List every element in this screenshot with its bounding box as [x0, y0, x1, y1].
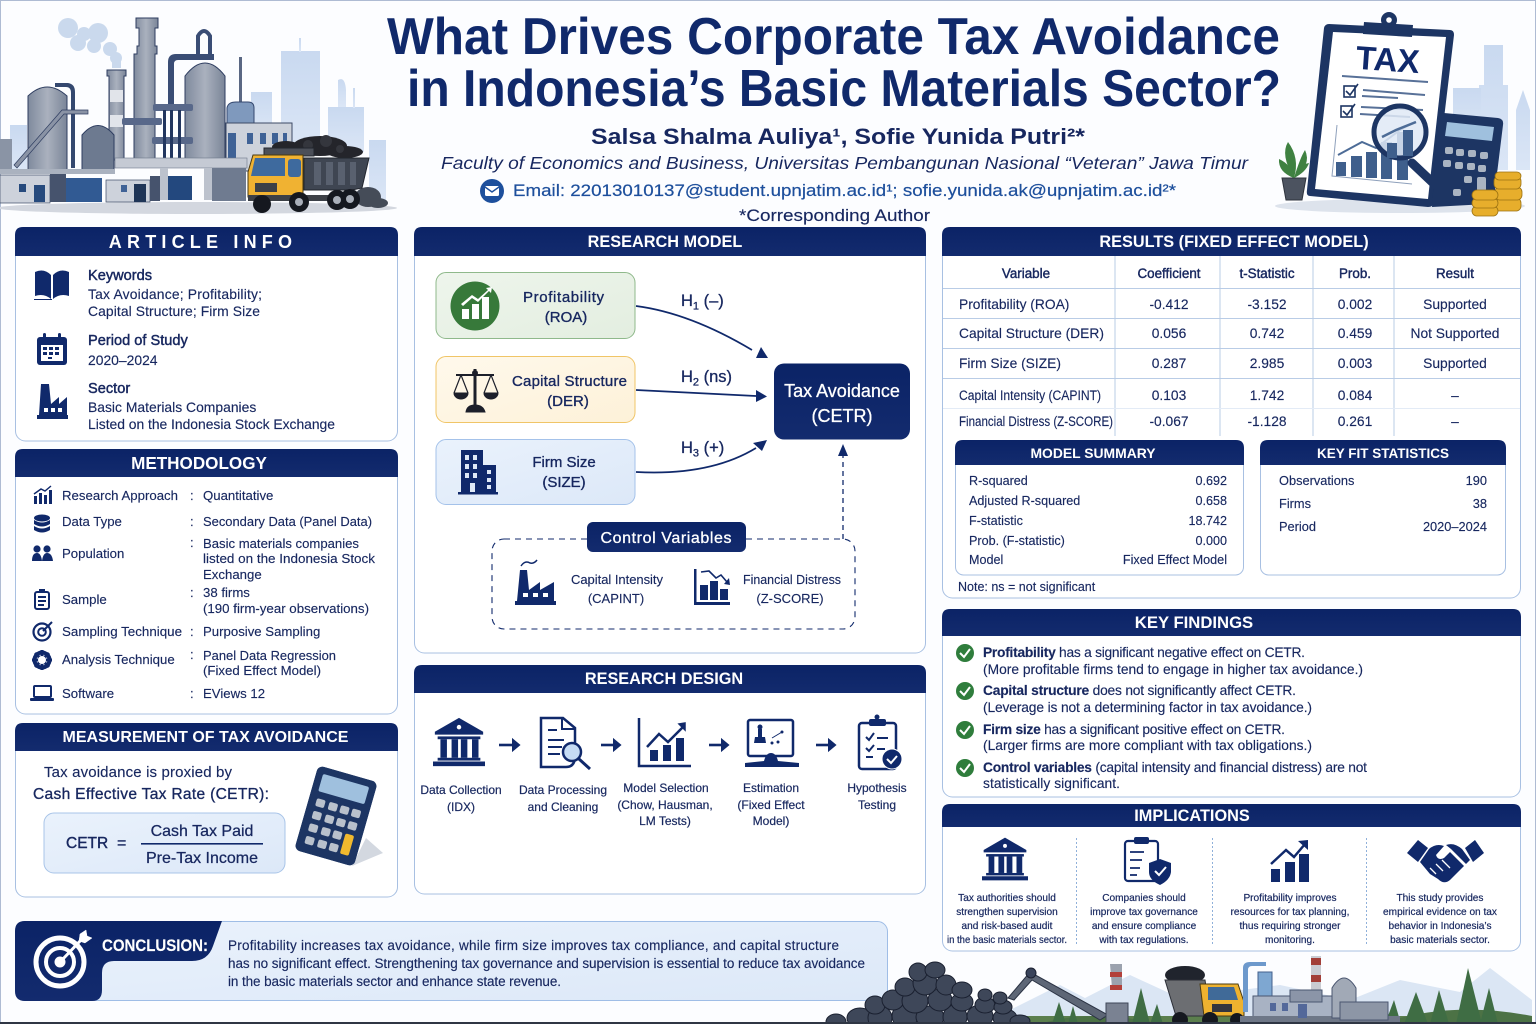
key fit values: Observations [1279, 473, 1354, 488]
row: data type: : [190, 514, 194, 529]
results header: RESULTS (FIXED EFFECT MODEL) [1099, 233, 1369, 251]
row: sample: (190 firm-year observations) [203, 601, 369, 616]
row: financial distress: -0.067 [1149, 414, 1189, 429]
research model header [414, 227, 926, 256]
key fit values: 190 [1466, 473, 1487, 488]
table header row: Coefficient [1137, 266, 1201, 281]
sub-panel: key fit statistics [1260, 440, 1506, 575]
row: capital structure: Not Supported [1411, 326, 1499, 341]
row: financial distress [959, 414, 1459, 429]
table header row [1002, 266, 1474, 281]
arrow [816, 740, 835, 750]
illustration: coal mine and industry landscape [0, 956, 1536, 1024]
table note: Note: ns = not significant [958, 580, 1096, 594]
authors: Salsa Shalma Auliya¹, Sofie Yunida Putri²* [591, 124, 1085, 149]
row: sample [35, 585, 369, 616]
formula: CETR: CETR [66, 835, 108, 852]
finding 4 [956, 759, 1367, 791]
implication: companies: and ensure compliance [1092, 921, 1197, 932]
illustration: tax clipboard, magnifier, calculator, coins: TAX [1355, 39, 1421, 80]
row: firm size: 2.985 [1250, 356, 1285, 371]
icon: email [480, 179, 504, 203]
definition text [33, 764, 269, 803]
row: population: : [190, 535, 194, 550]
research design header: RESEARCH DESIGN [585, 670, 743, 688]
results header [942, 227, 1521, 256]
keywords [88, 268, 262, 319]
model summary values: 0.658 [1195, 494, 1227, 508]
row: capital structure: 0.742 [1250, 326, 1284, 341]
row: sampling technique [34, 622, 320, 640]
financial distress label: (Z-SCORE) [756, 591, 824, 606]
step: hypothesis testing: Testing [858, 798, 896, 812]
arrow: H3 [636, 439, 767, 472]
model summary values: Model [969, 553, 1003, 567]
formula: CETR [44, 813, 285, 873]
row: software [30, 686, 265, 701]
step: data collection: Data Collection [420, 783, 502, 797]
variable: firm size: (SIZE) [542, 474, 586, 491]
step: estimation: Estimation [743, 781, 799, 795]
keywords: Keywords [88, 268, 152, 284]
model summary values: Adjusted R-squared [969, 494, 1080, 508]
finding 3 [956, 721, 1312, 753]
arrow: H3: (+) [699, 439, 724, 457]
arrow: H2: (ns) [699, 368, 732, 386]
panel: methodology [15, 449, 398, 714]
research model header: RESEARCH MODEL [588, 233, 742, 251]
row: data type: Secondary Data (Panel Data) [203, 514, 372, 529]
sector: Basic Materials Companies [88, 399, 256, 415]
conclusion text: Profitability increases tax avoidance, while firm size improves tax compliance, and capital structure [228, 938, 839, 953]
row: capital intensity: – [1451, 388, 1459, 403]
finding 4: statistically significant. [983, 776, 1120, 791]
row: research approach [34, 486, 273, 504]
finding 1: Profitability has a significant negative effect on CETR. [983, 645, 1305, 660]
article info header: ARTICLE INFO [109, 232, 297, 252]
table header row: Result [1436, 266, 1474, 281]
conclusion text: in the basic materials sector and enhance state revenue. [228, 974, 561, 989]
illustration: industrial plant and coal truck [0, 18, 397, 214]
sub-panel: model summary [955, 440, 1244, 575]
step: data processing: Data Processing [519, 783, 607, 797]
conclusion text [228, 938, 865, 989]
row: analysis technique: : [190, 647, 194, 662]
step: hypothesis testing: Hypothesis [847, 781, 907, 795]
step: data processing [519, 718, 607, 814]
row: population: Basic materials companies [203, 536, 359, 551]
row: capital structure: 0.459 [1338, 326, 1373, 341]
row: population: Population [62, 546, 124, 561]
implication: handshake: This study provides [1397, 893, 1483, 904]
row: population [32, 535, 375, 582]
conclusion badge: CONCLUSION: [102, 936, 208, 955]
model summary values: 0.692 [1195, 474, 1227, 488]
illustration: tax clipboard, magnifier, calculator, coins [1275, 12, 1530, 216]
row: firm size: 0.003 [1338, 356, 1373, 371]
variable: profitability: Profitability [523, 289, 604, 306]
implication: profitability: monitoring. [1265, 935, 1315, 946]
model summary values: R-squared [969, 474, 1028, 488]
finding 1 [956, 644, 1363, 677]
step: hypothesis testing [847, 714, 907, 812]
row: research approach: : [190, 488, 194, 503]
formula: CETR: = [117, 835, 126, 852]
row: population: Exchange [203, 567, 262, 582]
keywords: Tax Avoidance; Profitability; [88, 286, 262, 302]
model summary values: Fixed Effect Model [1123, 553, 1227, 567]
capital intensity label: Capital Intensity [571, 572, 664, 587]
row: sampling technique: Sampling Technique [62, 624, 182, 639]
table header row: Variable [1002, 266, 1050, 281]
arrow: H3: H [681, 439, 693, 457]
key fit values: Firms [1279, 496, 1311, 511]
step: model selection: LM Tests) [639, 814, 691, 828]
row: software: Software [62, 686, 114, 701]
step: model selection: Model Selection [623, 781, 709, 795]
key fit values [1279, 473, 1487, 534]
row: firm size: 0.287 [1152, 356, 1186, 371]
row: sample: 38 firms [203, 585, 250, 600]
finding 2 [956, 682, 1312, 715]
row: firm size: Supported [1423, 356, 1487, 371]
variable: firm size [436, 440, 635, 504]
row: firm size [959, 356, 1487, 371]
table header row: t-Statistic [1239, 266, 1295, 281]
key findings header: KEY FINDINGS [1135, 613, 1253, 632]
implication: tax authorities: and risk-based audit [962, 921, 1053, 932]
finding 2: Capital structure does not significantly affect CETR. [983, 683, 1296, 698]
row: analysis technique: Analysis Technique [62, 652, 175, 667]
icon: open book [34, 271, 69, 300]
key fit values: Period [1279, 519, 1316, 534]
variable: capital structure [436, 356, 635, 422]
model summary header: MODEL SUMMARY [1030, 445, 1156, 461]
step: model selection [617, 718, 713, 828]
implication: handshake: empirical evidence on tax [1383, 907, 1497, 918]
title [387, 8, 1281, 118]
implication: profitability: Profitability improves [1243, 893, 1337, 904]
formula: CETR: Pre-Tax Income [146, 850, 258, 867]
panel: results [942, 227, 1521, 598]
implication: profitability: thus requiring stronger [1240, 921, 1341, 932]
control variables badge: Control Variables [600, 530, 732, 547]
arrow: H2: H [681, 368, 693, 386]
icon: target [36, 930, 92, 986]
arrow: H1: 1 [693, 300, 699, 312]
row: capital intensity: 1.742 [1250, 388, 1284, 403]
capital intensity label: (CAPINT) [588, 591, 644, 606]
conclusion text: has no significant effect. Strengthening tax governance and supervision is essential to reduce tax avoidance [228, 956, 865, 971]
step: estimation [737, 720, 805, 828]
panel: research design [414, 665, 926, 894]
measurement header: MEASUREMENT OF TAX AVOIDANCE [63, 729, 349, 746]
panel: implications [942, 804, 1521, 951]
row: capital intensity: 0.084 [1338, 388, 1373, 403]
model summary values: 18.742 [1188, 514, 1227, 528]
implication: profitability [1231, 840, 1349, 946]
dependent variable: tax avoidance [774, 364, 910, 440]
arrow [601, 740, 620, 750]
implication: profitability: resources for tax planning, [1231, 907, 1349, 918]
variable: firm size: Firm Size [532, 454, 596, 471]
variable: profitability [436, 272, 635, 338]
period of study: Period of Study [88, 333, 188, 349]
financial distress label: Financial Distress [743, 572, 841, 587]
model summary values: 0.000 [1195, 534, 1227, 548]
definition text: Tax avoidance is proxied by [44, 764, 232, 781]
key findings header [942, 609, 1521, 636]
sector [88, 381, 335, 432]
step: estimation: (Fixed Effect [737, 798, 805, 812]
email addresses: Email: 22013010137@student.upnjatim.ac.id¹; sofie.yunida.ak@upnjatim.ac.id²* [513, 181, 1176, 200]
row: sampling technique: : [190, 624, 194, 639]
arrow: H2 [636, 368, 767, 402]
key fit header: KEY FIT STATISTICS [1317, 446, 1449, 461]
panel: conclusion [15, 921, 888, 1001]
icon: factory [37, 384, 68, 419]
step: model selection: (Chow, Hausman, [617, 798, 713, 812]
arrow: controls to CETR [838, 444, 848, 539]
model summary values [969, 474, 1227, 567]
row: firm size: Firm Size (SIZE) [959, 356, 1061, 371]
step: estimation: Model) [753, 814, 789, 828]
implications header: IMPLICATIONS [1134, 807, 1250, 825]
row: capital intensity: 0.103 [1152, 388, 1187, 403]
affiliation: Faculty of Economics and Business, Universitas Pembangunan Nasional “Veteran” Jawa Timur [441, 153, 1249, 173]
row: capital structure: Capital Structure (DER) [959, 326, 1104, 341]
row: sample: : [190, 585, 194, 600]
arrow: H3: 3 [693, 448, 699, 460]
row: data type [34, 514, 372, 532]
implication: companies [1090, 837, 1198, 946]
row: research approach: Research Approach [62, 488, 178, 503]
definition text: Cash Effective Tax Rate (CETR): [33, 786, 269, 803]
step: data collection [420, 718, 502, 814]
capital intensity label [571, 572, 664, 606]
row: research approach: Quantitative [203, 488, 273, 503]
row: data type: Data Type [62, 514, 122, 529]
row: profitability: Profitability (ROA) [959, 297, 1069, 312]
row: financial distress: 0.261 [1338, 414, 1372, 429]
implication: companies: with tax regulations. [1098, 935, 1189, 946]
finding 4: Control variables (capital intensity and financial distress) are not [983, 760, 1367, 775]
implication: handshake [1383, 840, 1497, 946]
row: capital structure: 0.056 [1152, 326, 1187, 341]
step: data collection: (IDX) [447, 800, 475, 814]
implication: handshake: behavior in Indonesia’s [1388, 921, 1492, 932]
implication: tax authorities: Tax authorities should [958, 893, 1056, 904]
title: What Drives Corporate Tax Avoidance [387, 8, 1280, 66]
variable: capital structure: Capital Structure [512, 373, 627, 390]
row: capital structure [959, 326, 1499, 341]
row: profitability: -0.412 [1149, 297, 1189, 312]
sector: Listed on the Indonesia Stock Exchange [88, 416, 335, 432]
finding 2: (Leverage is not a determining factor in tax avoidance.) [983, 700, 1312, 715]
period of study [88, 333, 188, 368]
panel: measurement of tax avoidance [15, 723, 398, 897]
corresponding author note: *Corresponding Author [739, 206, 930, 225]
row: profitability [959, 297, 1487, 312]
implications header [942, 804, 1521, 827]
row: analysis technique [32, 647, 336, 678]
model summary values: Prob. (F-statistic) [969, 534, 1065, 548]
article info header [15, 227, 398, 256]
measurement header [15, 723, 398, 751]
implication: tax authorities: in the basic materials sector. [947, 935, 1067, 946]
model summary values: F-statistic [969, 514, 1023, 528]
sector: Sector [88, 381, 130, 397]
key fit header [1260, 440, 1506, 465]
formula: CETR: Cash Tax Paid [151, 823, 253, 840]
row: sample: Sample [62, 592, 107, 607]
implication: companies: Companies should [1102, 893, 1186, 904]
control variables group [492, 444, 855, 629]
arrow: H1: (–) [699, 292, 724, 310]
row: software: : [190, 686, 194, 701]
row: sampling technique: Purposive Sampling [203, 624, 320, 639]
icon: calendar [37, 333, 67, 365]
row: financial distress: – [1451, 414, 1459, 429]
implication: handshake: basic materials sector. [1390, 935, 1490, 946]
finding 1: (More profitable firms tend to engage in higher tax avoidance.) [983, 662, 1363, 677]
control variables badge [587, 522, 746, 552]
row: analysis technique: Panel Data Regression [203, 648, 336, 663]
finding 3: Firm size has a significant positive effect on CETR. [983, 722, 1285, 737]
row: software: EViews 12 [203, 686, 265, 701]
arrow [709, 740, 728, 750]
row: analysis technique: (Fixed Effect Model) [203, 663, 321, 678]
icon: financial distress chart [694, 569, 730, 605]
row: profitability: 0.002 [1338, 297, 1372, 312]
icon: capital intensity factory [515, 560, 556, 605]
row: population: listed on the Indonesia Stock [203, 551, 375, 566]
methodology header: METHODOLOGY [131, 454, 267, 473]
research design header [414, 665, 926, 693]
implication: tax authorities: strengthen supervision [956, 907, 1058, 918]
conclusion badge [15, 921, 222, 1001]
panel: article info [15, 227, 398, 441]
panel: key findings [942, 609, 1521, 797]
row: profitability: -3.152 [1247, 297, 1287, 312]
period of study: 2020–2024 [88, 352, 158, 368]
title: in Indonesia’s Basic Materials Sector? [407, 60, 1281, 118]
methodology header [15, 449, 398, 477]
row: financial distress: Financial Distress (Z-SCORE) [959, 414, 1113, 429]
arrow: H1 [636, 292, 768, 358]
key fit values: 2020–2024 [1423, 519, 1487, 534]
results table [943, 256, 1520, 436]
row: capital intensity: Capital Intensity (CAPINT) [959, 388, 1101, 403]
implication: companies: improve tax governance [1090, 907, 1198, 918]
key fit values: 38 [1473, 496, 1487, 511]
row: profitability: Supported [1423, 297, 1487, 312]
keywords: Capital Structure; Firm Size [88, 303, 260, 319]
row: capital intensity [959, 388, 1459, 403]
step: data processing: and Cleaning [528, 800, 598, 814]
table header row: Prob. [1339, 266, 1371, 281]
variable: capital structure: (DER) [547, 393, 589, 410]
illustration: calculator [294, 765, 383, 867]
arrow [499, 740, 519, 750]
dependent variable: tax avoidance: Tax Avoidance [784, 381, 900, 401]
financial distress label [743, 572, 841, 606]
model summary header [955, 440, 1244, 465]
implication: tax authorities [947, 838, 1067, 946]
panel: research model [414, 227, 926, 653]
arrow: H2: 2 [693, 376, 699, 388]
arrow: H1: H [681, 292, 693, 310]
dependent variable: tax avoidance: (CETR) [812, 406, 872, 426]
variable: profitability: (ROA) [545, 309, 587, 326]
row: financial distress: -1.128 [1247, 414, 1287, 429]
finding 3: (Larger firms are more compliant with tax obligations.) [983, 738, 1312, 753]
